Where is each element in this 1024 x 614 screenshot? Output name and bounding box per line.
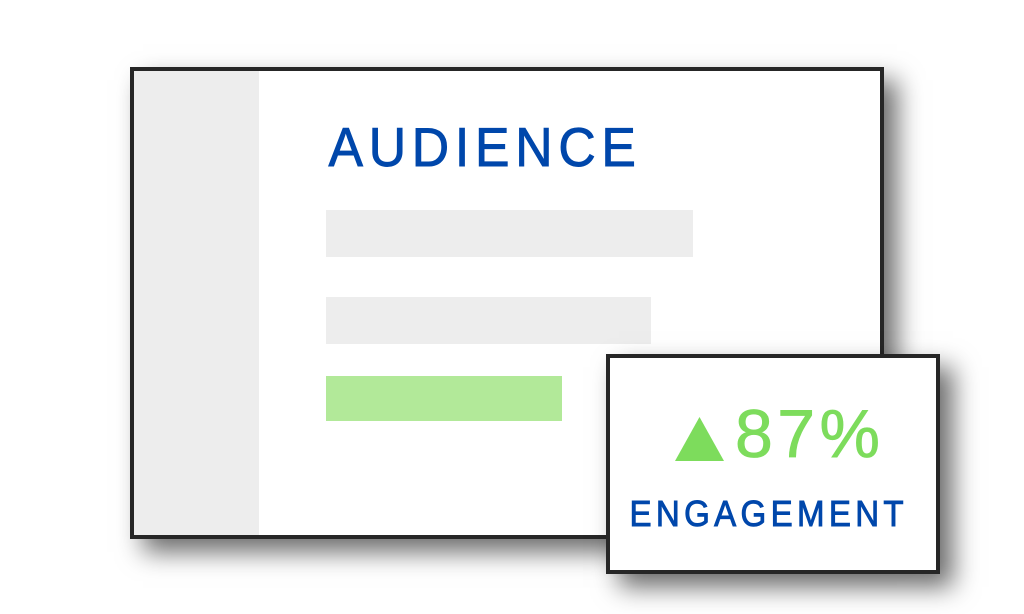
- panel: audience screen: [130, 67, 884, 539]
- icon: up triangle: [675, 417, 724, 461]
- highlighted bar: green: [326, 376, 562, 421]
- placeholder bar: first row: [326, 210, 693, 257]
- panel: engagement card: [606, 354, 940, 574]
- heading: audience: AUDIENCE: [328, 118, 636, 178]
- stat: 87 percent: 87%: [735, 396, 880, 472]
- label: engagement: ENGAGEMENT: [630, 495, 904, 534]
- sidebar: [134, 71, 259, 535]
- placeholder bar: second row: [326, 297, 651, 344]
